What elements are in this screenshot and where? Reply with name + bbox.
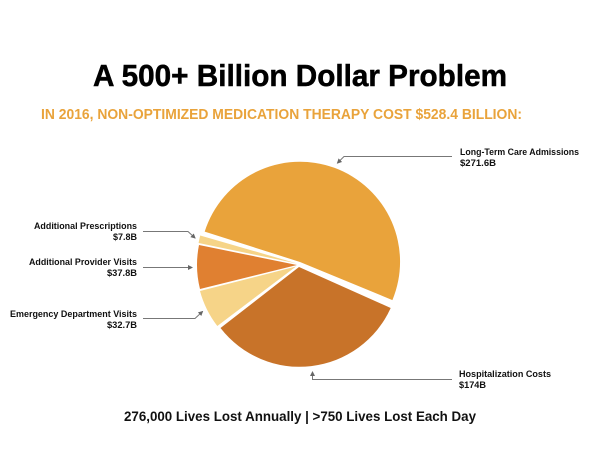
label: long-term care admissions: $271.6B	[460, 158, 496, 169]
slice: emergency department visits	[200, 266, 296, 326]
title: A 500+ Billion Dollar Problem	[93, 59, 507, 93]
slice: additional provider visits	[197, 245, 297, 289]
label: emergency department visits: Emergency Department Visits	[10, 309, 137, 320]
slice: hospitalization costs	[220, 267, 391, 367]
arrow: emergency department visits	[143, 312, 202, 318]
label: long-term care admissions: Long-Term Care Admissions	[460, 147, 579, 158]
label: additional prescriptions	[34, 221, 137, 243]
slice: additional prescriptions	[199, 236, 297, 264]
slice: long-term care admissions	[205, 162, 400, 300]
pie chart	[197, 162, 400, 367]
arrow: additional prescriptions	[143, 232, 195, 238]
arrow: additional provider visits	[143, 266, 192, 268]
label: additional prescriptions: $7.8B	[113, 232, 137, 243]
label: long-term care admissions	[460, 147, 579, 169]
label: additional prescriptions: Additional Prescriptions	[34, 221, 137, 232]
label: additional provider visits: $37.8B	[107, 268, 137, 279]
subtitle: IN 2016, NON-OPTIMIZED MEDICATION THERAPY COST $528.4 BILLION:	[41, 107, 522, 123]
label: emergency department visits: $32.7B	[107, 320, 137, 331]
label: hospitalization costs: Hospitalization Costs	[459, 369, 551, 380]
footer statistic: 276,000 Lives Lost Annually | >750 Lives Lost Each Day	[124, 409, 476, 424]
label: emergency department visits	[10, 309, 137, 331]
arrow: hospitalization costs	[312, 372, 452, 380]
arrow: long-term care admissions	[338, 156, 452, 163]
label: hospitalization costs	[459, 369, 551, 391]
label: hospitalization costs: $174B	[459, 380, 486, 391]
label: additional provider visits: Additional Provider Visits	[29, 257, 137, 268]
label: additional provider visits	[29, 257, 137, 279]
